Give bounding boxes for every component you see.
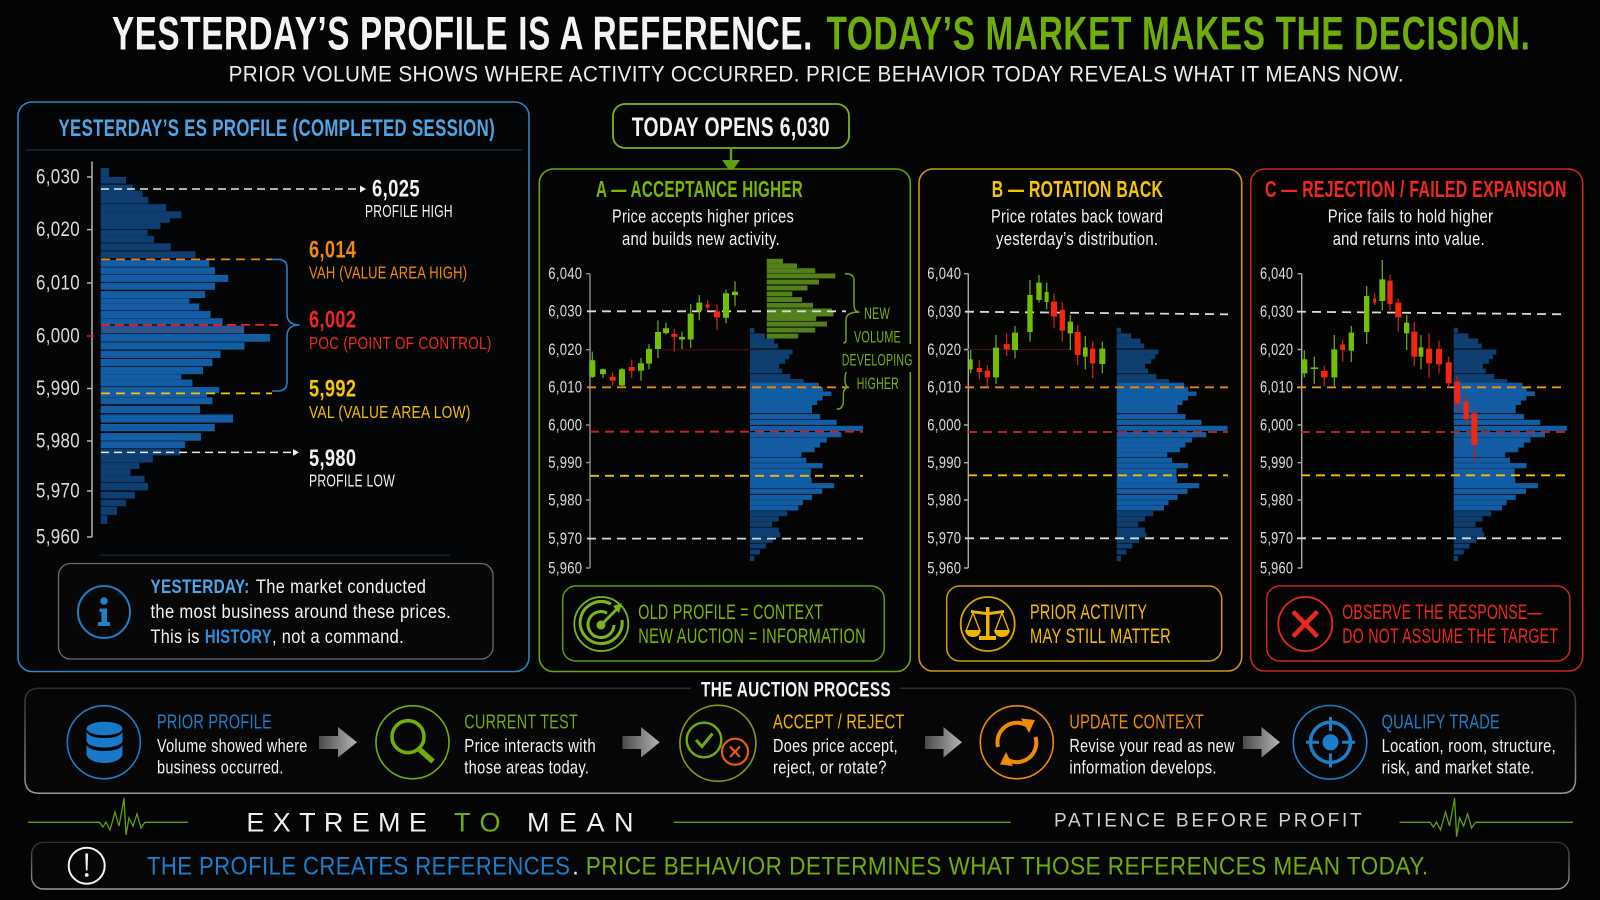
section heading: THE AUCTION PROCESS — [701, 679, 891, 702]
price axis: 6,000 — [36, 324, 80, 348]
arrow: today opens to scenario A — [722, 148, 740, 173]
point of control marker: 6,002 — [309, 306, 356, 334]
icon: database — [67, 706, 140, 779]
brand: extreme to mean: MEAN — [527, 808, 634, 838]
price axis: 5,970 — [1260, 529, 1293, 548]
price axis: 6,010 — [1260, 378, 1293, 397]
arrow — [622, 727, 660, 758]
price axis: 5,960 — [927, 558, 961, 577]
callout: yesterday: The market conducted — [256, 576, 426, 598]
step: update context: Revise your read as new — [1069, 736, 1235, 756]
new volume label: DEVELOPING — [842, 352, 913, 370]
profile low marker: 5,980 — [309, 445, 356, 472]
step: prior profile — [67, 706, 308, 779]
banner: key takeaway — [32, 842, 1569, 889]
callout: old profile, new auction — [563, 586, 884, 661]
callout: prior activity: PRIOR ACTIVITY — [1030, 601, 1147, 624]
panel: C rejection / failed expansion — [1251, 169, 1583, 671]
panel: B rotation back — [919, 169, 1242, 671]
step: qualify trade: QUALIFY TRADE — [1382, 711, 1500, 734]
banner: key takeaway: PRICE BEHAVIOR DETERMINES WHAT THOSE REFERENCES MEAN TODAY. — [586, 853, 1429, 881]
step: prior profile: PRIOR PROFILE — [157, 711, 272, 734]
panel heading: A — ACCEPTANCE HIGHER — [596, 176, 803, 202]
candlesticks — [969, 275, 1105, 387]
step: prior profile: Volume showed where — [157, 736, 308, 756]
subtitle: PRIOR VOLUME SHOWS WHERE ACTIVITY OCCURRED. PRICE BEHAVIOR TODAY REVEALS WHAT IT MEANS NOW. — [229, 62, 1404, 86]
price axis: 6,010 — [36, 272, 80, 294]
banner: key takeaway: . — [572, 853, 579, 881]
profile low marker — [101, 445, 395, 490]
description: yesterday’s distribution. — [996, 229, 1158, 249]
price axis: 6,010 — [927, 378, 961, 397]
callout: yesterday — [58, 564, 493, 659]
prior volume profile — [1454, 328, 1567, 561]
callout: old profile, new auction: OLD PROFILE = CONTEXT — [638, 601, 823, 624]
panel: the auction process — [25, 679, 1576, 793]
step: update context — [980, 706, 1235, 779]
icon: target — [574, 597, 628, 651]
arrow — [319, 727, 357, 758]
price axis: 6,040 — [548, 264, 582, 283]
icon: scales — [961, 597, 1015, 651]
reference lines — [965, 312, 1228, 538]
price axis: 5,990 — [1260, 453, 1293, 472]
description: Price rotates back toward — [991, 206, 1163, 226]
pulse line left — [28, 798, 188, 835]
description — [612, 206, 794, 249]
value area high marker: VAH (VALUE AREA HIGH) — [309, 263, 467, 283]
new volume bracket — [837, 274, 859, 409]
price axis: 5,980 — [36, 430, 80, 452]
icon: crosshair — [1293, 706, 1367, 779]
new volume profile — [767, 259, 835, 338]
point of control marker — [101, 306, 492, 353]
description: and returns into value. — [1333, 229, 1485, 249]
price axis: 6,020 — [927, 340, 961, 359]
description: and builds new activity. — [622, 229, 780, 249]
value area low marker: 5,992 — [309, 376, 356, 403]
candlesticks — [1301, 260, 1477, 462]
step: accept / reject — [680, 705, 905, 781]
icon: refresh — [980, 706, 1053, 779]
callout: yesterday: , not a command. — [272, 626, 404, 648]
price axis: 5,990 — [548, 453, 582, 472]
new volume label — [842, 305, 915, 393]
reference lines — [587, 311, 863, 539]
pulse line right — [1400, 798, 1573, 837]
new volume label: NEW — [864, 305, 890, 323]
point of control marker: POC (POINT OF CONTROL) — [309, 333, 492, 353]
callout: yesterday: HISTORY — [205, 626, 272, 648]
panel: yesterday's ES profile — [18, 102, 529, 672]
prior volume profile — [750, 328, 863, 561]
brand: extreme to mean — [246, 808, 634, 838]
volume profile histogram — [101, 168, 270, 524]
icon: x mark — [1278, 597, 1332, 651]
panel heading: YESTERDAY’S ES PROFILE (COMPLETED SESSION) — [58, 115, 495, 142]
step: accept / reject: Does price accept, — [773, 736, 898, 756]
step: current test — [376, 706, 596, 779]
icon: check and x — [680, 705, 756, 781]
profile high marker: PROFILE HIGH — [365, 201, 453, 221]
price axis: 5,990 — [927, 453, 961, 472]
description — [1328, 206, 1493, 249]
value area low marker: VAL (VALUE AREA LOW) — [309, 402, 471, 422]
price axis: 6,030 — [1260, 302, 1293, 321]
price axis: 6,010 — [548, 378, 582, 397]
price axis: 5,980 — [548, 490, 582, 509]
price axis: 5,960 — [548, 558, 582, 577]
profile low marker: PROFILE LOW — [309, 470, 395, 490]
new volume label: HIGHER — [857, 375, 899, 393]
price axis: 5,960 — [36, 526, 80, 548]
price axis: 5,970 — [36, 480, 80, 502]
price axis: 6,040 — [927, 264, 961, 283]
step: current test: those areas today. — [464, 758, 589, 778]
prior volume profile — [1117, 328, 1227, 561]
icon: info — [78, 586, 130, 638]
price axis — [548, 264, 590, 577]
icon: exclamation — [69, 848, 105, 884]
step: accept / reject: ACCEPT / REJECT — [773, 711, 905, 734]
step: qualify trade: Location, room, structure, — [1382, 736, 1556, 756]
step: qualify trade — [1293, 706, 1556, 779]
new volume label: VOLUME — [854, 328, 901, 346]
panel heading: B — ROTATION BACK — [992, 176, 1163, 202]
value area bracket — [272, 259, 300, 391]
arrow — [925, 727, 962, 758]
title: YESTERDAY’S PROFILE IS A REFERENCE. — [112, 6, 813, 60]
price axis: 5,970 — [927, 529, 961, 548]
step: current test: CURRENT TEST — [464, 711, 578, 734]
price axis: 5,960 — [1260, 558, 1293, 577]
tagline: patience before profit: PATIENCE BEFORE PROFIT — [1054, 811, 1362, 832]
price axis — [36, 162, 94, 548]
description: Price accepts higher prices — [612, 206, 794, 226]
brand: extreme to mean: EXTREME — [246, 808, 427, 838]
candlesticks — [589, 281, 738, 387]
step: accept / reject: reject, or rotate? — [773, 758, 887, 778]
step: update context: information develops. — [1069, 758, 1217, 778]
callout: yesterday: the most business around these prices. — [150, 601, 451, 623]
icon: magnifier — [376, 706, 449, 779]
price axis: 6,020 — [1260, 340, 1293, 359]
description — [991, 206, 1163, 249]
arrow — [1243, 727, 1280, 758]
price axis: 5,990 — [36, 377, 80, 400]
step: qualify trade: risk, and market state. — [1382, 758, 1535, 778]
step: current test: Price interacts with — [464, 736, 596, 756]
price axis: 6,040 — [1260, 264, 1293, 283]
price axis: 6,000 — [548, 415, 582, 434]
callout: yesterday: This is — [150, 626, 200, 648]
today opens box — [613, 104, 849, 148]
callout: old profile, new auction: NEW AUCTION = INFORMATION — [638, 625, 866, 648]
price axis: 5,980 — [927, 490, 961, 509]
price axis — [1260, 264, 1302, 577]
price axis: 6,030 — [36, 166, 80, 188]
value area low marker — [101, 376, 471, 422]
value area high marker — [101, 236, 467, 283]
description: Price fails to hold higher — [1328, 206, 1493, 226]
profile high marker — [101, 176, 453, 221]
price axis: 6,000 — [1260, 415, 1293, 434]
callout: prior activity: MAY STILL MATTER — [1030, 625, 1171, 648]
today opens box: TODAY OPENS 6,030 — [632, 112, 830, 142]
price axis: 6,030 — [548, 302, 582, 321]
profile high marker: 6,025 — [372, 176, 420, 202]
value area high marker: 6,014 — [309, 236, 357, 264]
callout: observe the response — [1267, 586, 1570, 661]
reference lines — [1297, 312, 1566, 538]
price axis: 6,020 — [36, 218, 80, 241]
price axis: 5,970 — [548, 529, 582, 548]
step: update context: UPDATE CONTEXT — [1069, 711, 1204, 734]
brand: extreme to mean: TO — [454, 808, 501, 838]
price axis: 5,980 — [1260, 490, 1293, 509]
price axis — [927, 264, 968, 577]
panel: A acceptance higher — [539, 169, 915, 672]
callout: yesterday: YESTERDAY: — [150, 576, 250, 598]
step: prior profile: business occurred. — [157, 758, 284, 778]
callout: prior activity — [947, 586, 1222, 661]
price axis: 6,030 — [927, 302, 961, 321]
price axis: 6,020 — [548, 340, 582, 359]
banner: key takeaway: THE PROFILE CREATES REFERENCES — [147, 853, 570, 881]
price axis: 6,000 — [927, 415, 961, 434]
